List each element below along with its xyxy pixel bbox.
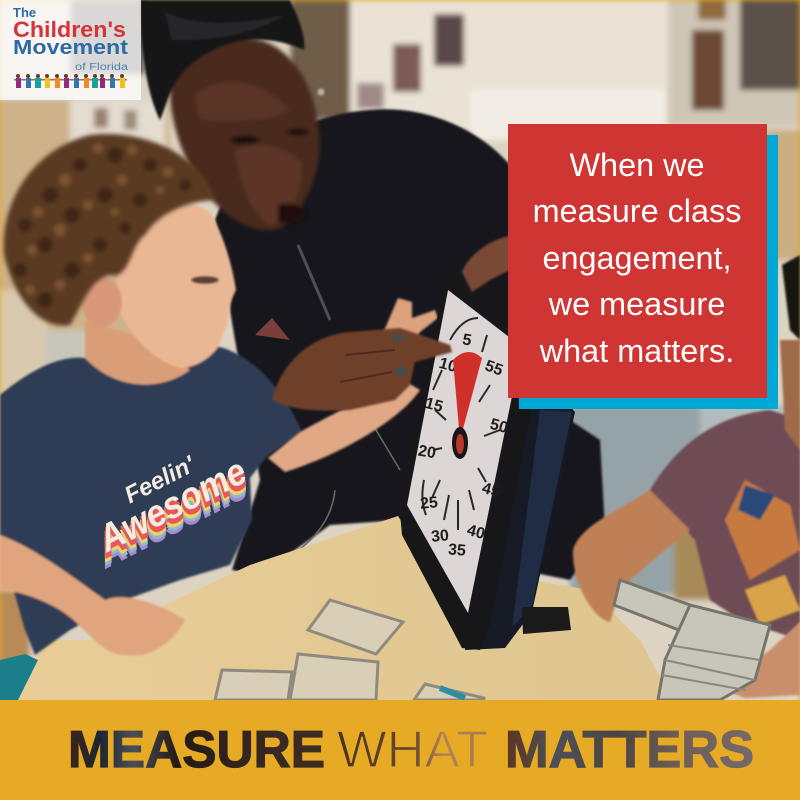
- teacher hand on timer: [272, 328, 452, 411]
- teacher zipper: [298, 245, 330, 320]
- clock numbers: 20: [417, 443, 437, 462]
- logo text: of Florida: [75, 62, 129, 73]
- child fingers: [378, 298, 438, 365]
- clock numbers: 35: [447, 541, 467, 560]
- logo panel: [0, 0, 141, 100]
- shirt graphic: Awesome: [91, 455, 254, 565]
- clock numbers: 15: [423, 395, 445, 416]
- teacher torso: [215, 109, 605, 580]
- teal mat: [0, 654, 38, 700]
- clock stand: [522, 607, 571, 634]
- logo text: Children's: [13, 17, 126, 42]
- callout text: measure class: [533, 193, 741, 229]
- clock numbers: 30: [430, 527, 450, 546]
- clock: [399, 262, 575, 650]
- clock frame: [399, 262, 535, 650]
- footer title: [68, 721, 754, 779]
- footer title: MATTERS: [505, 721, 754, 779]
- block stack: [614, 580, 770, 700]
- callout shadow block: [519, 135, 778, 409]
- table: [15, 516, 672, 700]
- child left: [0, 204, 302, 656]
- clock numbers: 55: [483, 357, 505, 380]
- footer band: [0, 700, 800, 800]
- teacher shirt logo: [255, 318, 290, 340]
- blocks on table: [215, 600, 484, 700]
- callout red panel: [508, 124, 767, 398]
- callout text: what matters.: [539, 333, 734, 369]
- clock hub: [452, 427, 468, 459]
- callout text: we measure: [548, 286, 725, 322]
- clock numbers: 10: [437, 355, 459, 376]
- hair: [4, 134, 215, 326]
- shirt graphic: Awesome: [91, 465, 253, 576]
- clock numbers: [417, 331, 510, 560]
- logo text: Movement: [13, 37, 128, 59]
- teacher turban: [140, 0, 324, 120]
- teacher cord: [265, 420, 400, 570]
- shirt graphic: Awesome: [91, 459, 253, 569]
- logo text: The: [13, 5, 36, 20]
- dial ticks: [422, 318, 500, 530]
- face: [115, 204, 236, 368]
- logo children row: [14, 74, 127, 88]
- footer title: MEASURE: [68, 721, 325, 779]
- logo text: [13, 5, 129, 73]
- clock body side: [465, 330, 575, 650]
- right child: [573, 255, 800, 698]
- callout text: When we: [569, 147, 705, 183]
- forearm: [268, 375, 420, 472]
- wall photos: [393, 44, 421, 92]
- teacher head: [170, 37, 320, 230]
- callout text: [533, 147, 741, 369]
- clock numbers: 40: [465, 522, 487, 543]
- shirt graphic: Awesome: [91, 451, 254, 561]
- callout text: engagement,: [542, 240, 732, 276]
- shirt graphic: Awesome: [91, 462, 254, 572]
- arm: [0, 535, 185, 656]
- clock numbers: 5: [461, 331, 473, 350]
- red timer wedge: [453, 352, 482, 440]
- clock face: [407, 290, 522, 613]
- footer title: WHAT: [337, 721, 488, 779]
- shirt: [0, 345, 302, 655]
- neck: [85, 320, 190, 385]
- clock numbers: 45: [480, 480, 502, 501]
- clock numbers: 50: [488, 416, 510, 437]
- shirt graphic: Feelin': [120, 450, 201, 509]
- callout box: [508, 124, 778, 409]
- clock numbers: 25: [419, 494, 439, 513]
